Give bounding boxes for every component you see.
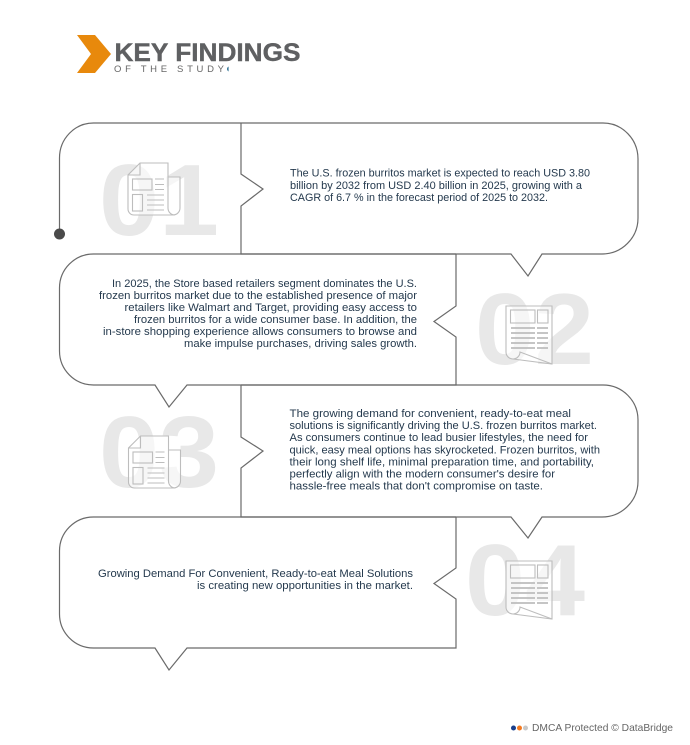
footer: DMCA badge [511, 723, 673, 734]
subtitle: OF THE STUDY [114, 64, 225, 75]
icon: newspaper 04 [506, 561, 552, 619]
panel outline 01 [60, 123, 638, 276]
text block 01: billion by 2032 from USD 2.40 billion in 2025, growing with a [290, 180, 583, 192]
panel: finding 03 [99, 385, 638, 538]
panel: finding 04 [60, 517, 585, 670]
text block 04: Growing Demand For Convenient, Ready-to-eat Meal Solutions [98, 568, 413, 580]
text block 03: their long shelf life, minimal preparation time, and portability, [290, 456, 594, 468]
number 02: 02 [475, 274, 594, 386]
text block 02: frozen burritos for a wide consumer base. In addition, the [134, 314, 417, 326]
panel: finding 01 [54, 123, 638, 276]
text block 02: in-store shopping experience allows consumers to browse and [103, 326, 417, 338]
text block 03: quick, easy meal options has skyrocketed. Frozen burritos, with [290, 444, 600, 456]
text block 04 [98, 568, 413, 592]
timeline start dot [54, 228, 65, 240]
number 03: 03 [99, 397, 219, 509]
panel outline 03 [241, 385, 638, 538]
panel: finding 02 [60, 254, 594, 407]
number 01: 01 [99, 145, 219, 257]
text block 02: retailers like Walmart and Target, providing easy access to [124, 302, 417, 314]
text block 03: The growing demand for convenient, ready-to-eat meal [290, 408, 571, 420]
text block 03 [290, 408, 600, 492]
panel outline 02 [60, 254, 456, 407]
text block 02: frozen burritos market due to the established presence of major [99, 290, 417, 302]
text block 02: make impulse purchases, driving sales growth. [184, 338, 417, 350]
number 04: 04 [465, 525, 585, 637]
header: key findings of the study [77, 35, 300, 75]
text block 01: The U.S. frozen burritos market is expected to reach USD 3.80 [290, 168, 590, 180]
icon: newspaper 02 [506, 306, 552, 364]
text block 03: perfectly align with the modern consumer's desire for [290, 468, 555, 480]
icon: newspaper 01 [128, 163, 180, 215]
text block 03: As consumers continue to lead busier lifestyles, the need for [290, 432, 588, 444]
icon: blue half dot [227, 66, 228, 72]
icon: orange chevron [77, 35, 111, 73]
title: KEY FINDINGS [114, 39, 300, 67]
text block 04: is creating new opportunities in the market. [197, 580, 413, 592]
text block 02: In 2025, the Store based retailers segment dominates the U.S. [112, 278, 417, 290]
icon: newspaper 03 [128, 436, 180, 488]
text block 03: hassle-free meals that don't compromise on taste. [290, 480, 543, 492]
footer dots [511, 726, 528, 730]
text block 01: CAGR of 6.7 % in the forecast period of 2025 to 2032. [290, 192, 548, 204]
panel outline 04 [60, 517, 456, 670]
text block 02 [99, 278, 417, 350]
text block 01 [290, 168, 590, 204]
text block 03: solutions is significantly driving the U.S. frozen burritos market. [290, 420, 597, 432]
footer text: DMCA Protected © DataBridge [532, 723, 673, 734]
